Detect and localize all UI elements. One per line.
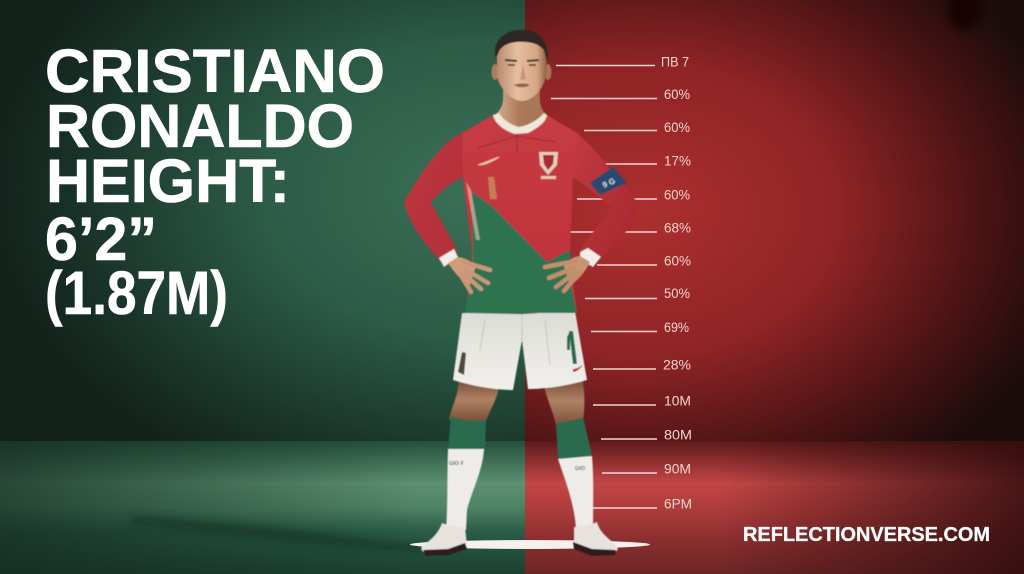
title: CRISTIANO — [45, 37, 385, 105]
height scale ruler: ПВ 7 — [661, 54, 689, 70]
height scale ruler: 60% — [664, 87, 690, 102]
player figure — [404, 30, 638, 556]
jersey torso — [460, 115, 577, 313]
height scale ruler: 60% — [664, 254, 691, 268]
height scale ruler: 80M — [664, 428, 692, 442]
panel: green background — [0, 0, 525, 574]
boots — [421, 522, 618, 556]
socks: white — [446, 449, 593, 530]
right arm — [545, 133, 638, 291]
panel: red background — [525, 0, 1024, 574]
socks: green calf bands — [448, 416, 592, 459]
title: (1.87M) — [45, 259, 228, 327]
legs — [449, 376, 584, 426]
height scale ruler: 69% — [664, 320, 689, 335]
player figure: GIO — [575, 466, 586, 472]
height scale ruler: 60% — [664, 188, 690, 202]
neck — [494, 90, 548, 133]
crest — [539, 152, 558, 179]
title: HEIGHT: — [46, 147, 290, 215]
height scale ruler: 6PM — [664, 496, 692, 512]
right arm: 9 G — [601, 176, 617, 190]
title — [45, 37, 385, 327]
height scale ruler: 90M — [664, 462, 691, 476]
left arm — [404, 133, 490, 292]
head — [492, 30, 552, 101]
player figure: GIO F — [449, 461, 465, 467]
height scale ruler: 60% — [664, 120, 690, 135]
collar — [493, 113, 547, 134]
title: 6’2” — [45, 205, 157, 273]
height scale ruler: 50% — [664, 286, 690, 301]
height scale ruler: 28% — [663, 358, 691, 372]
floor spotlight ellipse — [410, 540, 650, 549]
height scale ruler: 17% — [664, 154, 691, 168]
height scale ruler — [551, 54, 692, 512]
height scale ruler: 68% — [664, 220, 691, 236]
height scale ruler: 10M — [664, 394, 691, 408]
shorts — [453, 311, 587, 390]
website credit: REFLECTIONVERSE.COM — [743, 524, 990, 546]
title: RONALDO — [46, 92, 354, 160]
